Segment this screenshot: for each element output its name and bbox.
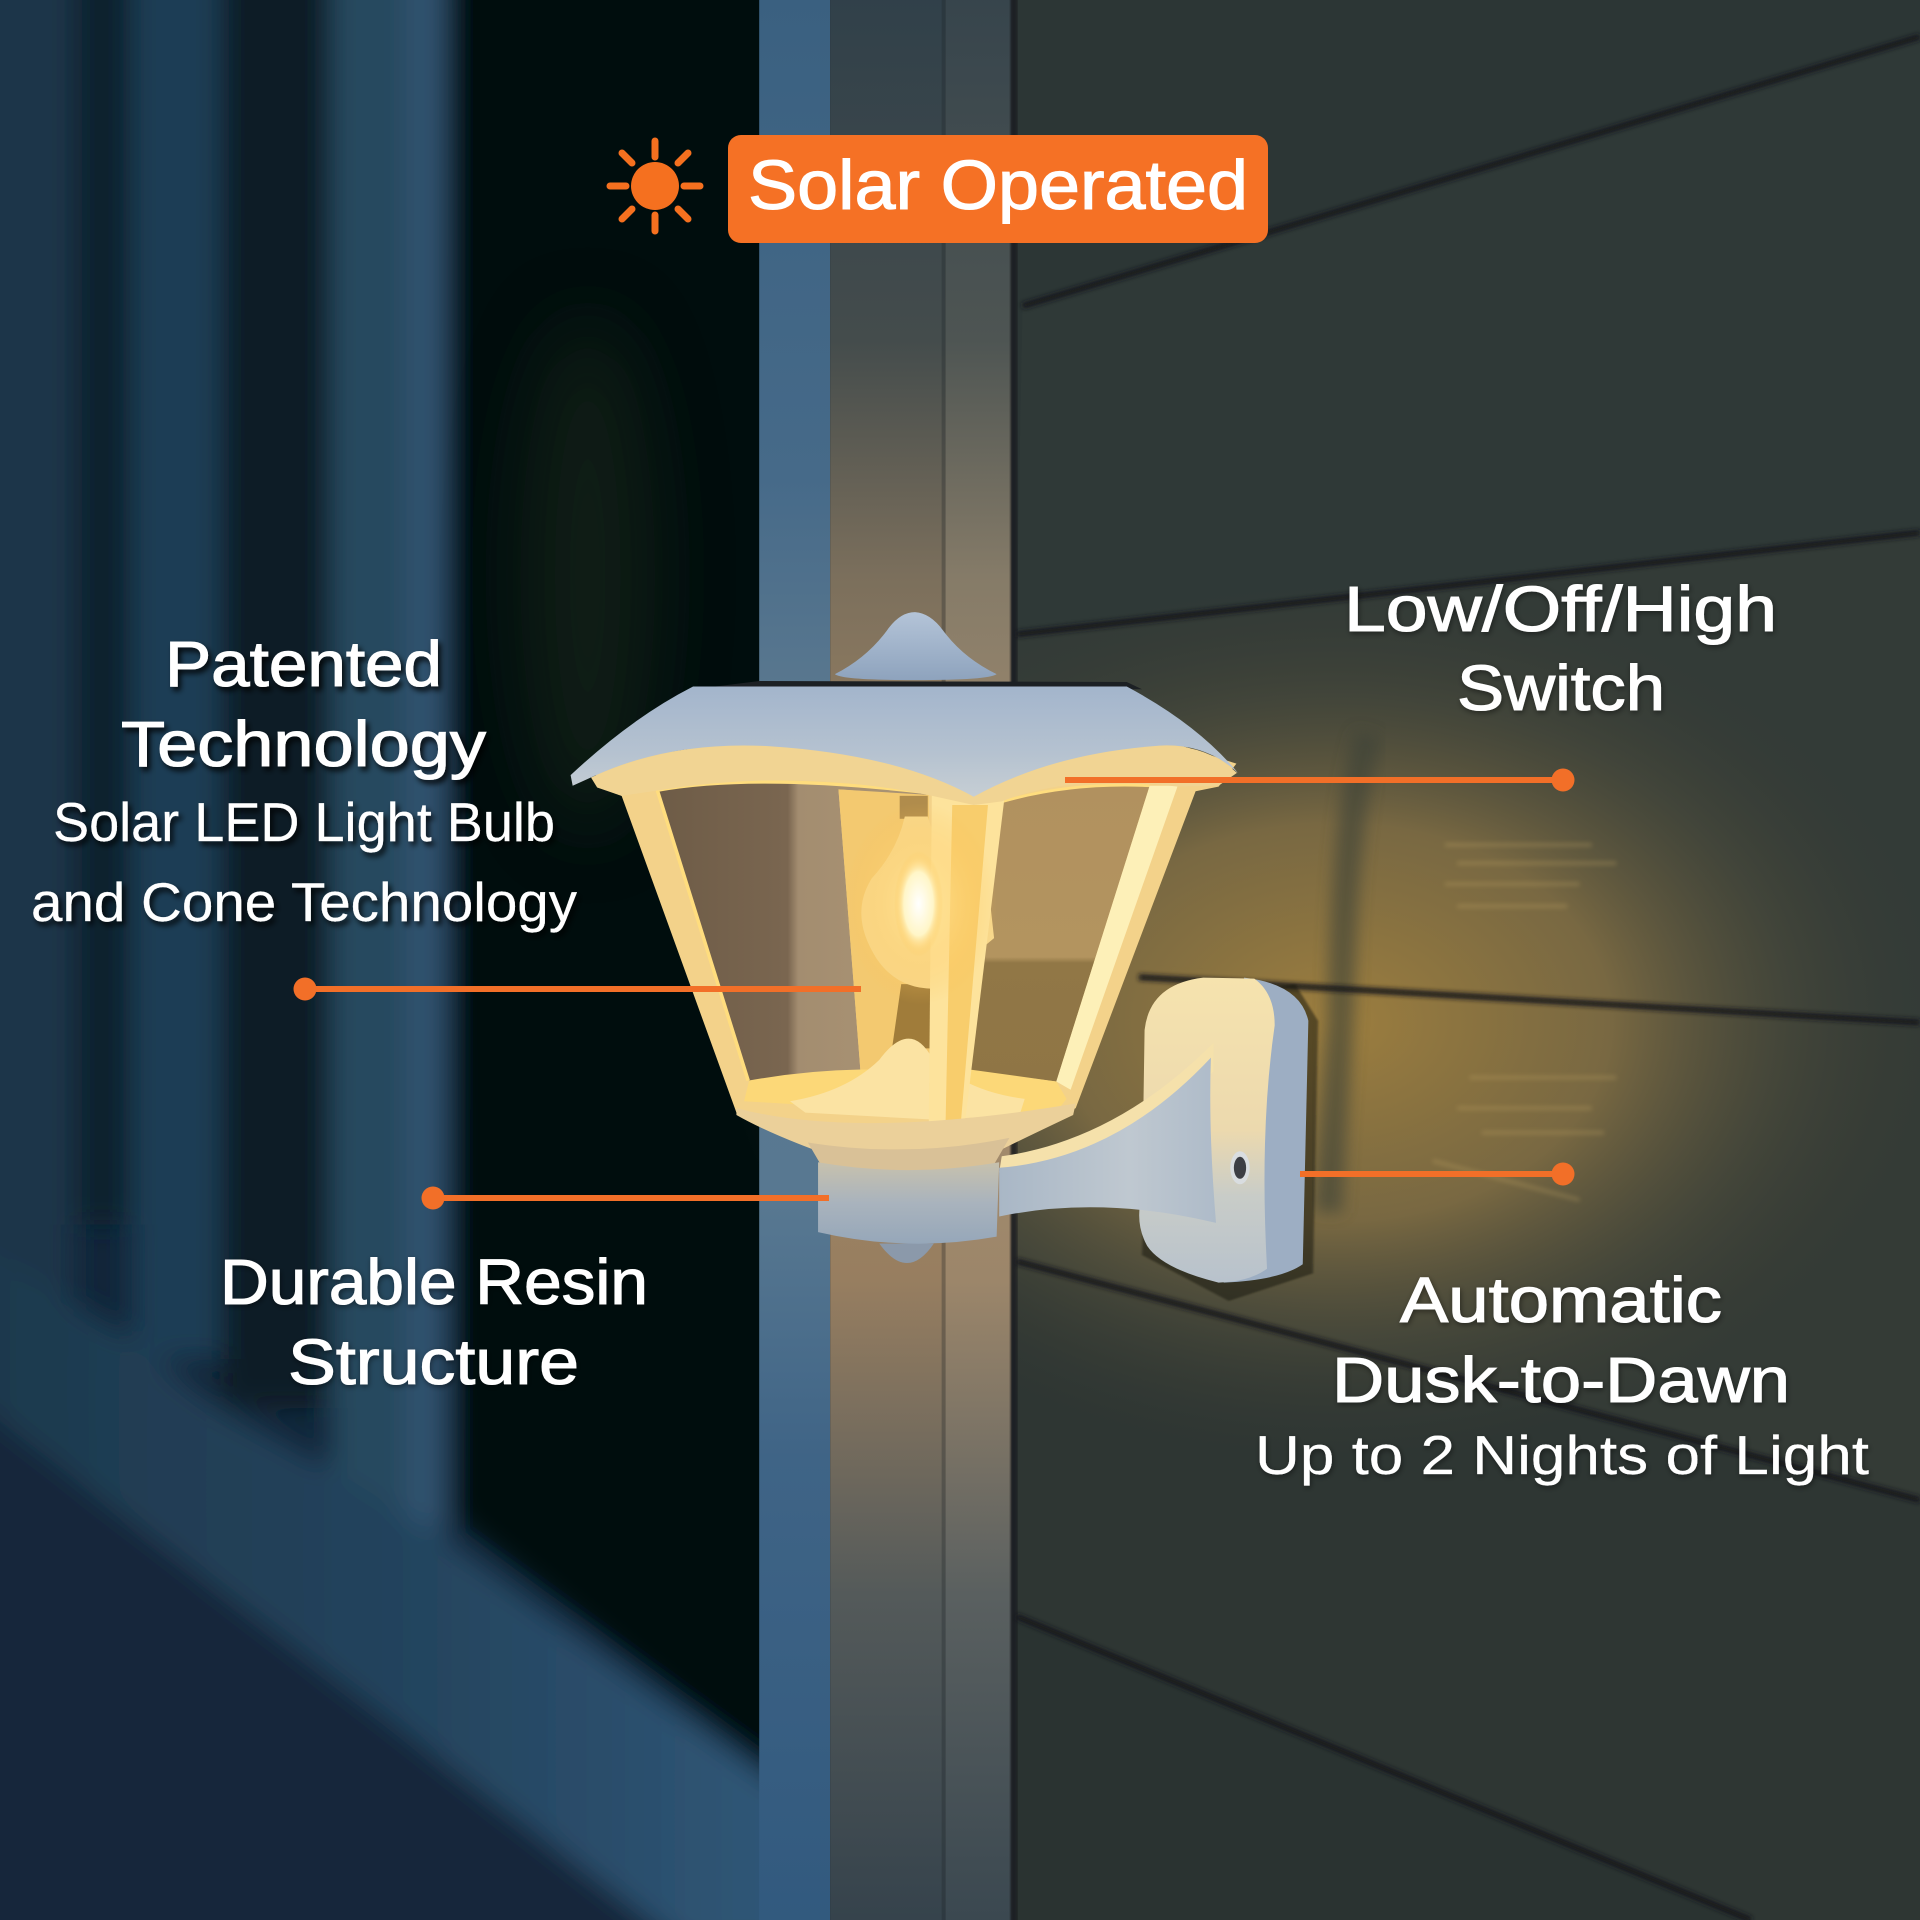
- lantern: right frame strip: [1056, 786, 1178, 1090]
- lantern: left glass pane: [658, 782, 928, 1081]
- lantern: main body: [594, 736, 1236, 1149]
- icon: sun: [610, 141, 700, 231]
- text: Automatic Dusk-to-Dawn: Dusk-to-Dawn: [1332, 1344, 1790, 1416]
- background: blurred window on the left: [0, 0, 808, 1920]
- background: siding wall on the right: [722, 0, 1920, 1920]
- text: Low/Off/High Switch: Switch: [1457, 652, 1665, 724]
- lantern: centre post shade: [946, 805, 988, 1122]
- lantern: wall plate front: [1139, 978, 1275, 1283]
- lantern: roof: [571, 687, 1238, 797]
- lantern: solar panel: [693, 681, 1142, 689]
- lantern: left pane glow edge: [657, 782, 923, 1081]
- lantern: base rim: [736, 1103, 1076, 1149]
- lantern: wall plate shadow: [1142, 984, 1318, 1301]
- text: Patented Technology: Solar LED Light Bulb: [53, 791, 555, 853]
- lantern: finial: [835, 612, 997, 680]
- badge: Solar Operated: [728, 135, 1268, 243]
- text: Automatic Dusk-to-Dawn: [1255, 1264, 1869, 1486]
- lantern: centre post: [929, 795, 1004, 1126]
- background: window frame and post: [759, 0, 1018, 1920]
- lantern: wall plate side: [1224, 978, 1308, 1283]
- text: Automatic Dusk-to-Dawn: Automatic: [1400, 1264, 1722, 1336]
- text: Low/Off/High Switch: [1344, 573, 1777, 724]
- lantern: socket: [900, 796, 928, 819]
- lantern: neck: [808, 1138, 1009, 1173]
- lantern: lamp stem: [892, 984, 930, 1048]
- text: Durable Resin Structure: Durable Resin: [220, 1246, 648, 1318]
- lantern: arm: [999, 1058, 1216, 1223]
- lantern: collar: [818, 1162, 999, 1244]
- lantern: inner bright pane: [838, 789, 930, 1072]
- text: Durable Resin Structure: Structure: [288, 1326, 579, 1398]
- text: Durable Resin Structure: [220, 1246, 648, 1398]
- text: Patented Technology: Patented: [165, 628, 442, 700]
- badge: Solar Operated: Solar Operated: [748, 146, 1248, 224]
- callout line: dusk-to-dawn: [1300, 1162, 1574, 1186]
- lantern: cone reflector: [790, 1039, 1025, 1120]
- lantern: screw: [1230, 1151, 1250, 1184]
- lantern: bulb halo: [844, 803, 997, 1005]
- callout line: bulb: [294, 978, 861, 1000]
- callout lines and dots: [294, 768, 1574, 1210]
- lantern: right pane glow edge: [1003, 785, 1150, 801]
- lantern: lower tray: [744, 1070, 1067, 1120]
- lantern: [571, 612, 1318, 1301]
- callout line: resin: [422, 1186, 829, 1210]
- text: Automatic Dusk-to-Dawn: Up to 2 Nights of Light: [1255, 1424, 1869, 1486]
- lantern: right glass pane: [970, 785, 1150, 1081]
- lantern: sensor: [879, 1244, 934, 1263]
- text: Patented Technology: and Cone Technology: [31, 871, 578, 933]
- text: Low/Off/High Switch: Low/Off/High: [1344, 573, 1777, 645]
- lantern: arm top edge: [999, 1043, 1213, 1177]
- callout line: switch: [1065, 768, 1574, 792]
- lantern: under-roof rim: [591, 746, 1237, 805]
- lantern: bulb: [861, 816, 994, 989]
- text: Patented Technology: [31, 628, 578, 933]
- text: Patented Technology: Technology: [121, 708, 486, 780]
- lantern: filament glow: [894, 851, 943, 957]
